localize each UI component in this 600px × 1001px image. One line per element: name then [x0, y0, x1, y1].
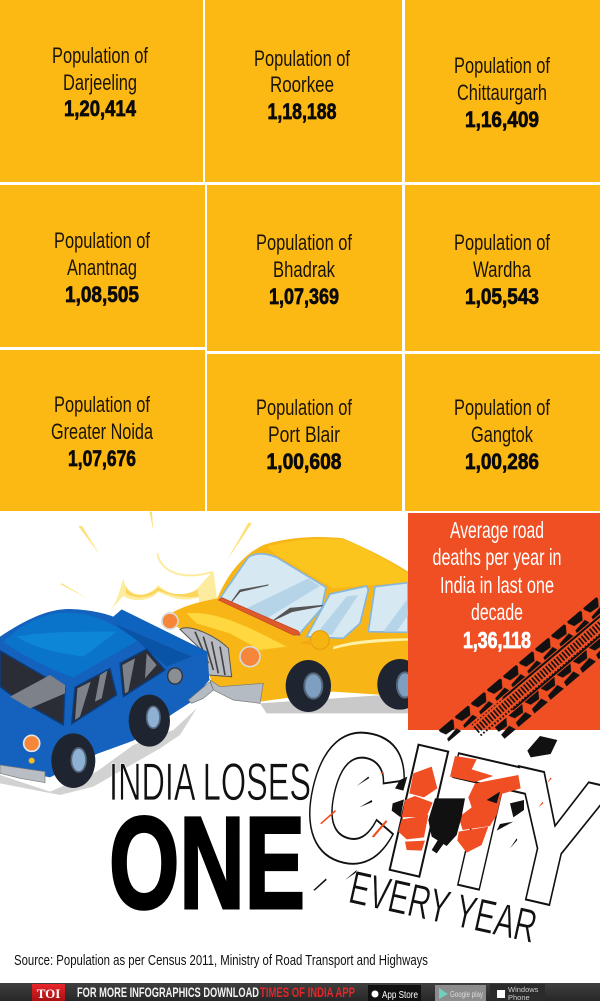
yellow car side windows [307, 586, 368, 638]
illustration: tyre tracks [439, 595, 600, 768]
panel: population of Greater Noida [0, 350, 205, 511]
panel: population of Greater Noida: 1,07,676 [68, 446, 136, 471]
panel: population of Greater Noida: Greater Noida [51, 419, 154, 444]
blue car wheels [51, 733, 95, 788]
panel: population of Darjeeling: Darjeeling [63, 70, 137, 95]
panel: population of Anantnag [0, 185, 205, 347]
footer: App Store badge [368, 985, 421, 1001]
source note: Source: Population as per Census 2011, Ministry of Road Transport and Highways [14, 953, 428, 969]
panel: population of Anantnag: Population of [54, 228, 151, 253]
yellow car windshield [221, 554, 326, 635]
panel: population of Darjeeling [0, 0, 203, 182]
panel: population of Wardha [405, 185, 600, 351]
panel: population of Gangtok: Population of [454, 395, 551, 420]
panel: population of Port Blair: 1,00,608 [266, 449, 342, 474]
panel: population of Bhadrak [207, 185, 402, 351]
blue car side windows [72, 668, 117, 724]
panel: population of Port Blair [207, 354, 402, 511]
title: India loses: INDIA LOSES [109, 753, 311, 812]
panel: population of Chittaurgarh: Population of [454, 53, 551, 78]
title: City letter base [287, 690, 600, 948]
footer bar [0, 983, 600, 1001]
illustration: blue car [0, 609, 213, 795]
panel: population of Bhadrak: Bhadrak [273, 257, 336, 282]
panel: average road deaths: India in last one [440, 572, 554, 598]
panel: population of Wardha: Population of [454, 230, 551, 255]
illustration: blood splatter [313, 736, 557, 891]
panel: population of Roorkee: Population of [254, 46, 351, 71]
panel: average road deaths: Average road [450, 517, 544, 543]
yellow car headlights [240, 647, 260, 667]
panel: population of Bhadrak: 1,07,369 [269, 284, 339, 309]
yellow car grille [180, 628, 232, 677]
panel: population of Chittaurgarh: Chittaurgarh [457, 80, 547, 105]
panel: population of Wardha: 1,05,543 [465, 284, 539, 309]
panel: population of Anantnag: 1,08,505 [65, 282, 139, 307]
panel: population of Gangtok [405, 354, 600, 511]
illustration: yellow car [162, 537, 423, 720]
blue car lights [24, 735, 40, 751]
yellow car bumper [210, 680, 263, 703]
panel: population of Chittaurgarh: 1,16,409 [465, 107, 539, 132]
panel: population of Roorkee: Roorkee [270, 72, 334, 97]
panel: population of Greater Noida: Population of [54, 392, 151, 417]
footer: Windows Phone badge [490, 984, 545, 1001]
yellow car wheels [286, 660, 331, 712]
panel: population of Roorkee [205, 0, 402, 182]
footer: Google Play badge: Google play [450, 990, 483, 999]
panel: population of Darjeeling: Population of [52, 43, 149, 68]
panel: population of Roorkee: 1,18,188 [268, 99, 336, 124]
panel: population of Chittaurgarh [405, 0, 600, 182]
footer: Windows Phone badge: Windows [508, 985, 539, 994]
panel: population of Gangtok: Gangtok [471, 422, 534, 447]
illustration: crash burst [60, 512, 252, 633]
title: One: ONE [109, 789, 305, 936]
panel: population of Port Blair: Port Blair [268, 422, 340, 447]
panel: population of Port Blair: Population of [256, 395, 353, 420]
blue car rear details [168, 668, 182, 684]
panel: population of Anantnag: Anantnag [67, 255, 137, 280]
footer: Google Play badge [435, 985, 486, 1001]
panel: average road deaths: 1,36,118 [463, 627, 531, 653]
panel: average road deaths: decade [471, 599, 523, 625]
footer: download message: FOR MORE INFOGRAPHICS DOWNLOAD [77, 984, 259, 1000]
panel: average road deaths [408, 513, 600, 730]
panel: population of Bhadrak: Population of [256, 230, 353, 255]
footer: TOI logo: TOI [37, 986, 60, 1001]
footer: App Store badge: App Store [382, 990, 418, 1001]
panel: population of Gangtok: 1,00,286 [465, 449, 539, 474]
yellow car wiper strip [218, 598, 300, 635]
footer: download message: TIMES OF INDIA APP [260, 984, 355, 1000]
panel: population of Wardha: Wardha [473, 257, 532, 282]
blue car windshield [0, 651, 65, 725]
panel: population of Darjeeling: 1,20,414 [64, 96, 137, 121]
footer: TOI logo [32, 984, 65, 1001]
blue car bumper [0, 765, 45, 783]
